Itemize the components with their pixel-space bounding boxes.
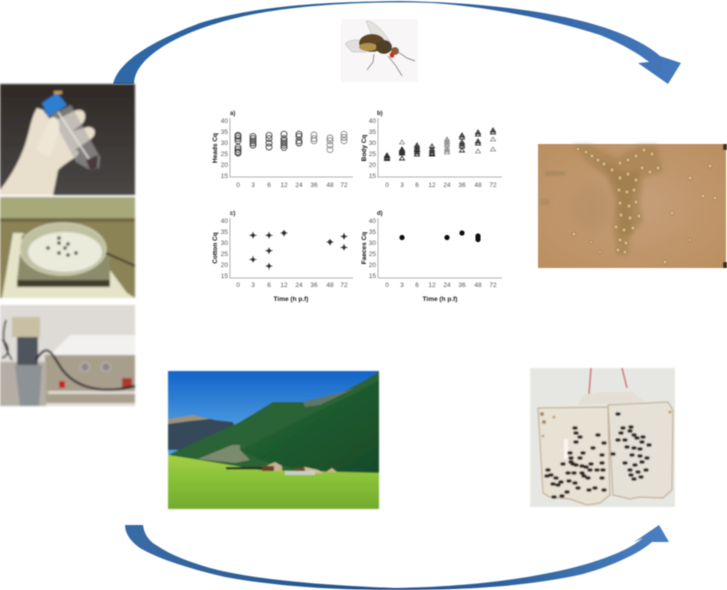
body — [359, 34, 385, 52]
buildings — [226, 467, 262, 470]
panel b: Body Cq — [361, 111, 502, 189]
panel d: Faeces Cq: 12 — [428, 282, 436, 289]
wire — [106, 253, 135, 266]
photo: alpine valley landscape — [168, 371, 379, 509]
panel c: Cotton Cq: 48 — [326, 282, 334, 289]
cable — [36, 350, 135, 390]
panel d: Faeces Cq: 20 — [369, 262, 376, 269]
hanging string — [586, 368, 627, 399]
panel a: Heads Cq: 25 — [221, 151, 228, 158]
panel b: Body Cq: 40 — [369, 118, 376, 125]
legs — [367, 52, 415, 76]
panel d: Faeces Cq: 48 — [474, 282, 482, 289]
panel b: Body Cq: b) — [377, 111, 383, 117]
panel c: Cotton Cq: 6 — [267, 282, 271, 289]
flies in dish — [46, 236, 78, 257]
panel b: Body Cq: 24 — [443, 182, 451, 189]
panel a: Heads Cq: 36 — [310, 182, 318, 189]
photo: gloved hand holding a tube — [0, 84, 135, 195]
panel a: Heads Cq — [212, 111, 353, 189]
panel a: Heads Cq: 48 — [326, 182, 334, 189]
panel a: Heads Cq: 20 — [221, 162, 228, 169]
photo: sticky trap with flies — [530, 368, 675, 507]
panel b: Body Cq: 15 — [369, 173, 376, 180]
panel c: Cotton Cq — [212, 211, 353, 303]
panel c: Cotton Cq: 24 — [295, 282, 303, 289]
panel b: Body Cq: 25 — [369, 151, 376, 158]
panel d: Faeces Cq: 15 — [369, 273, 376, 280]
panel d: Faeces Cq: 72 — [489, 282, 497, 289]
panel c: Cotton Cq: 35 — [221, 229, 228, 236]
panel c: Cotton Cq: 25 — [221, 251, 228, 258]
panel b: Body Cq: 35 — [369, 129, 376, 136]
panel a: Heads Cq: 24 — [295, 182, 303, 189]
panel d: Faeces Cq: d) — [377, 211, 383, 217]
thumb — [36, 117, 59, 158]
panel a: Heads Cq: 40 — [221, 118, 228, 125]
photo: cell culture micrograph — [538, 144, 727, 268]
photo: fly — [341, 19, 418, 82]
chart group: Cq scatter panels — [212, 111, 502, 303]
panel a: Heads Cq: 6 — [267, 182, 271, 189]
top tabs — [578, 392, 645, 405]
far mountain — [168, 415, 245, 450]
panel b: Body Cq: Body Cq — [361, 135, 368, 161]
panel c: Cotton Cq: 20 — [221, 262, 228, 269]
panel b: Body Cq: 30 — [369, 140, 376, 147]
panel a: Heads Cq: 15 — [221, 173, 228, 180]
panel c: Cotton Cq: 40 — [221, 218, 228, 225]
panel a: Heads Cq: 72 — [340, 182, 348, 189]
panel d: Faeces Cq: 6 — [415, 282, 419, 289]
photo: homogeniser equipment — [0, 305, 135, 406]
panel d: Faeces Cq: 25 — [369, 251, 376, 258]
panel d: Faeces Cq: 24 — [443, 282, 451, 289]
flies on boards — [546, 414, 650, 497]
panel a: Heads Cq: 12 — [280, 182, 288, 189]
grinder — [12, 317, 40, 337]
panel b: Body Cq: 20 — [369, 162, 376, 169]
panel c: Cotton Cq: 30 — [221, 240, 228, 247]
panel a: Heads Cq: Heads Cq — [212, 133, 219, 163]
tube cap — [42, 93, 67, 117]
panel c: Cotton Cq: 36 — [310, 282, 318, 289]
panel d: Faeces Cq: 0 — [385, 282, 389, 289]
panel c: Cotton Cq: 3 — [251, 282, 255, 289]
panel c: Cotton Cq: 12 — [280, 282, 288, 289]
panel b: Body Cq: 48 — [474, 182, 482, 189]
middle mountain — [170, 372, 379, 475]
panel d: Faeces Cq — [361, 211, 502, 303]
panel c: Cotton Cq: c) — [230, 211, 235, 217]
panel b: Body Cq: 72 — [489, 182, 497, 189]
dish — [20, 223, 106, 275]
panel c: Cotton Cq: 0 — [236, 282, 240, 289]
right board — [608, 402, 673, 499]
tube — [51, 105, 100, 170]
panel a: Heads Cq: 3 — [251, 182, 255, 189]
panel d: Faeces Cq: Faeces Cq — [361, 232, 368, 264]
panel a: Heads Cq: a) — [230, 111, 235, 117]
panel b: Body Cq: 6 — [415, 182, 419, 189]
panel a: Heads Cq: 30 — [221, 140, 228, 147]
panel c: Cotton Cq: Time (h p.f) — [274, 296, 308, 303]
panel a: Heads Cq: 35 — [221, 129, 228, 136]
panel d: Faeces Cq: 30 — [369, 240, 376, 247]
panel c: Cotton Cq: Cotton Cq — [212, 232, 219, 264]
panel d: Faeces Cq: 40 — [369, 218, 376, 225]
panel d: Faeces Cq: 35 — [369, 229, 376, 236]
arrow: top curved arrow — [113, 1, 681, 84]
panel b: Body Cq: 12 — [428, 182, 436, 189]
panel a: Heads Cq: 0 — [236, 182, 240, 189]
arrow: bottom curved arrow — [125, 525, 669, 590]
meadow — [168, 455, 379, 509]
panel d: Faeces Cq: 3 — [400, 282, 404, 289]
panel d: Faeces Cq: Time (h p.f) — [423, 296, 457, 303]
panel c: Cotton Cq: 72 — [340, 282, 348, 289]
panel c: Cotton Cq: 15 — [221, 273, 228, 280]
panel b: Body Cq: 3 — [400, 182, 404, 189]
left board — [538, 407, 610, 505]
panel b: Body Cq: 0 — [385, 182, 389, 189]
glove — [0, 108, 95, 195]
wings — [366, 21, 390, 42]
photo: petri dish on a plate — [0, 197, 135, 298]
panel d: Faeces Cq: 36 — [458, 282, 466, 289]
front ridge — [240, 380, 379, 472]
white platform — [2, 233, 135, 298]
panel b: Body Cq: 36 — [458, 182, 466, 189]
